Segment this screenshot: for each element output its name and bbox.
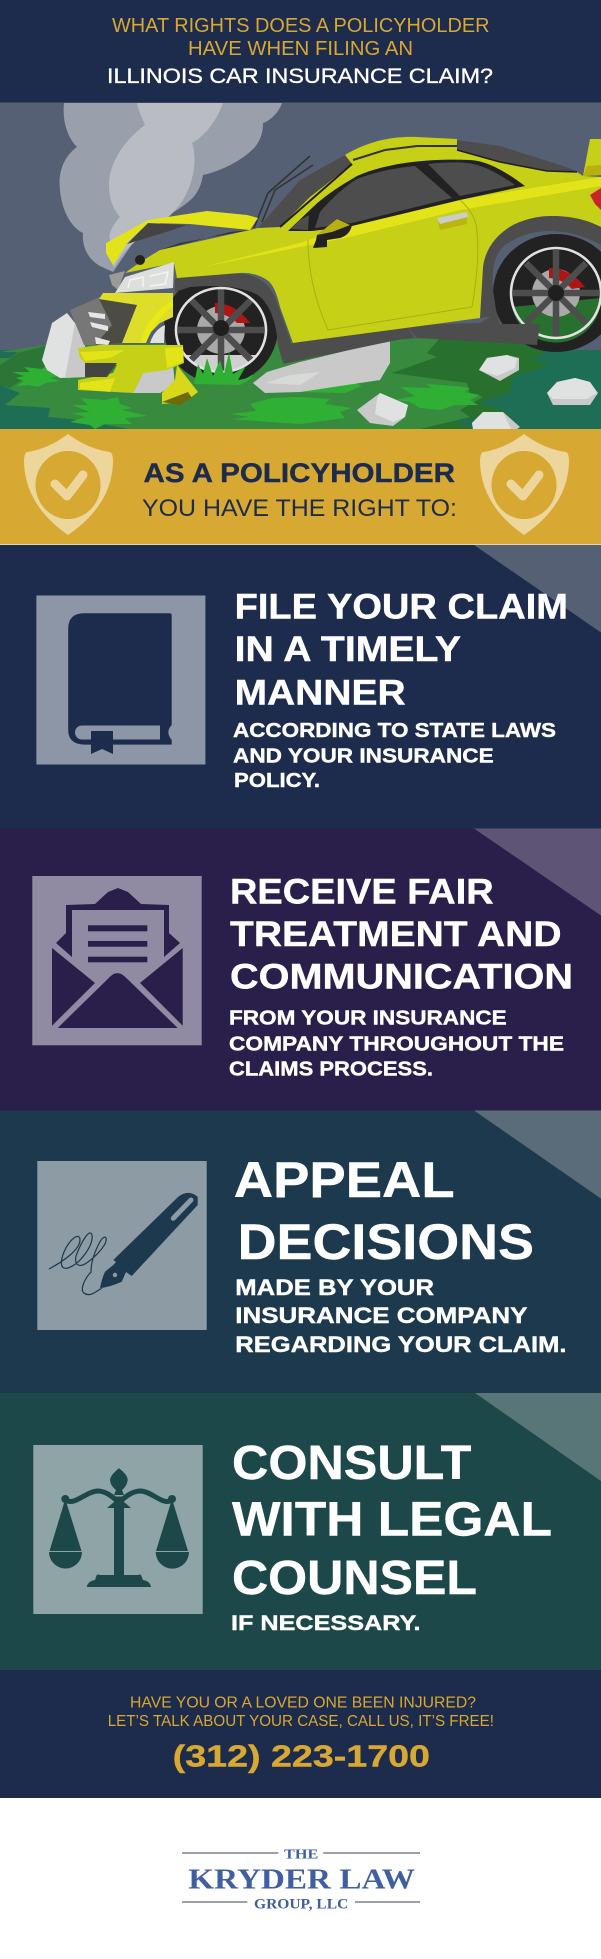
engine and big rock (42, 271, 137, 378)
text: receive fair treatment: COMPANY THROUGHOUT THE (229, 1034, 564, 1056)
door handle (437, 212, 468, 230)
smoke (60, 103, 282, 272)
phone number: (312) 223-1700 (173, 1739, 430, 1774)
text: appeal decisions (234, 1152, 567, 1357)
icon: fountain pen signature (37, 1161, 207, 1330)
spoiler and tail light (583, 139, 601, 210)
header panel (0, 0, 601, 103)
logo: the kryder law group: GROUP, LLC (254, 1896, 348, 1912)
broken front bumper lower (78, 345, 198, 405)
text: consult legal counsel: WITH LEGAL (232, 1494, 552, 1547)
grass tufts (12, 350, 480, 429)
call to action text: HAVE YOU OR A LOVED ONE BEEN INJURED? (130, 1694, 476, 1711)
roof trim (258, 140, 577, 228)
text: file your claim: POLICY. (234, 770, 320, 792)
text: appeal decisions: INSURANCE COMPANY (235, 1303, 528, 1328)
title question (107, 15, 493, 88)
text: file your claim: MANNER (235, 674, 406, 713)
car body (125, 137, 601, 343)
banner text: AS A POLICYHOLDER (144, 458, 455, 488)
broken front bumper upper (99, 293, 173, 343)
banner text (142, 458, 457, 522)
text: receive fair treatment: CLAIMS PROCESS. (229, 1059, 433, 1081)
rear wheel (493, 234, 601, 352)
title question: WHAT RIGHTS DOES A POLICYHOLDER (112, 15, 490, 37)
panel: file your claim (0, 545, 601, 829)
logo: the kryder law group (0, 1798, 601, 1959)
wipers (254, 156, 313, 228)
text: file your claim (233, 587, 568, 792)
icon: right shield with check (480, 434, 569, 535)
text: file your claim: ACCORDING TO STATE LAWS (233, 720, 556, 742)
logo: the kryder law group: KRYDER LAW (188, 1863, 415, 1895)
side mirror (313, 219, 352, 248)
panel: receive fair treatment (0, 828, 601, 1110)
icon: open envelope (32, 876, 202, 1045)
call to action text (108, 1694, 494, 1730)
text: consult legal counsel: CONSULT (232, 1437, 471, 1490)
icon: left shield with check (24, 434, 113, 535)
rocks (253, 340, 598, 429)
title question: HAVE WHEN FILING AN (188, 38, 413, 60)
text: appeal decisions: APPEAL (234, 1152, 455, 1208)
text: appeal decisions: REGARDING YOUR CLAIM. (235, 1332, 567, 1357)
panel: appeal decisions (0, 1110, 601, 1394)
footer call to action (0, 1670, 601, 1798)
ground (0, 338, 601, 429)
headlight (115, 262, 174, 293)
banner: as a policyholder (0, 429, 601, 545)
text: receive fair treatment: FROM YOUR INSURANCE (229, 1008, 507, 1030)
raised hood (106, 211, 258, 265)
illustration: crashed yellow car (0, 102, 601, 429)
title question: ILLINOIS CAR INSURANCE CLAIM? (107, 64, 493, 88)
text: file your claim: AND YOUR INSURANCE (233, 746, 494, 768)
body highlight (203, 177, 601, 267)
text: receive fair treatment: RECEIVE FAIR (230, 872, 494, 911)
text: appeal decisions: DECISIONS (238, 1214, 534, 1270)
logo: the kryder law group: THE (284, 1847, 318, 1862)
text: consult legal counsel: COUNSEL (232, 1552, 477, 1605)
text: file your claim: FILE YOUR CLAIM (235, 587, 568, 626)
text: appeal decisions: MADE BY YOUR (235, 1275, 434, 1300)
icon: scales of justice (33, 1445, 203, 1614)
icon: book (36, 596, 205, 764)
text: receive fair treatment (229, 872, 573, 1081)
wheel arches and side skirt (175, 216, 601, 364)
banner text: YOU HAVE THE RIGHT TO: (142, 495, 457, 522)
text: consult legal counsel (231, 1437, 552, 1635)
text: receive fair treatment: COMMUNICATION (230, 957, 573, 996)
front wheel (164, 286, 277, 385)
panel: consult legal counsel (0, 1393, 601, 1670)
windows (288, 160, 525, 231)
door outline (308, 200, 478, 330)
text: receive fair treatment: TREATMENT AND (230, 915, 562, 954)
call to action text: LET’S TALK ABOUT YOUR CASE, CALL US, IT’S FREE! (108, 1713, 494, 1730)
text: consult legal counsel: IF NECESSARY. (231, 1612, 420, 1635)
text: file your claim: IN A TIMELY (235, 630, 461, 669)
